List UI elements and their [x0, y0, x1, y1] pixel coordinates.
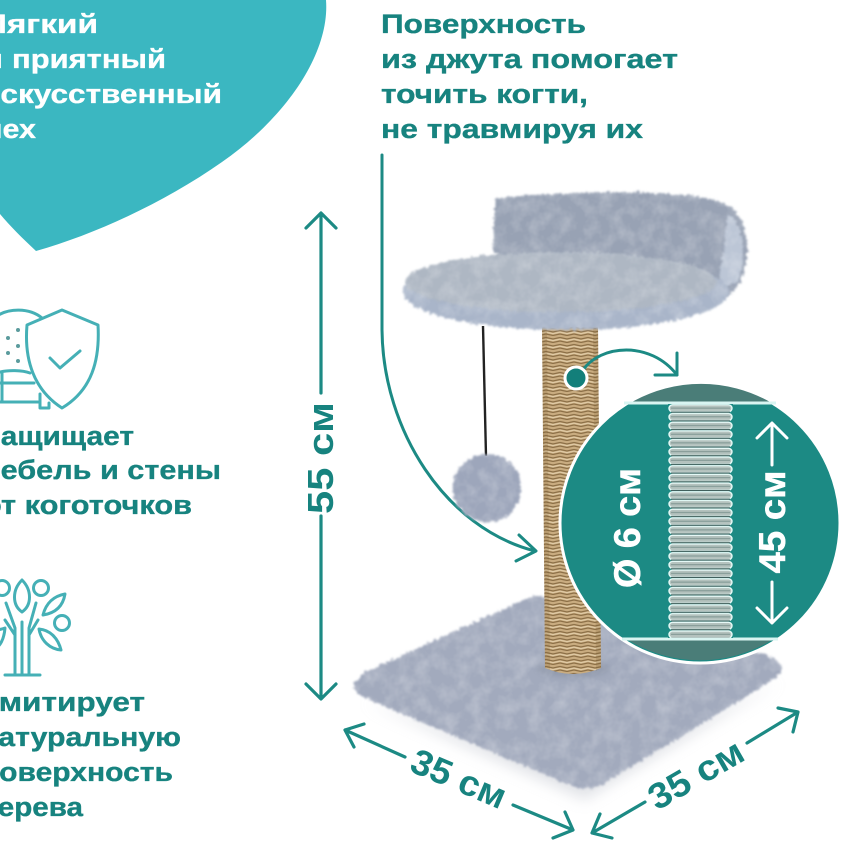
base shadow: [365, 682, 780, 800]
heading: jute surface: точить когти,: [381, 79, 588, 109]
band lines: [622, 403, 778, 639]
heading: jute surface: [381, 9, 678, 144]
circle background: [560, 383, 840, 663]
height dimension: 55 cm: [300, 213, 341, 699]
backrest: [493, 192, 747, 296]
heading: jute surface: не травмируя их: [381, 114, 643, 144]
toy ball: [453, 454, 521, 522]
post shadow: [537, 659, 609, 677]
post shading: [542, 325, 601, 671]
callout shape: [0, 0, 326, 251]
top cap: [632, 384, 770, 402]
callout text: приятный: [12, 44, 166, 74]
post height arrows: [757, 423, 787, 623]
callout pointer arrow: [565, 350, 677, 389]
text: protects furniture: [0, 421, 221, 520]
pointer dot: [565, 367, 587, 389]
height arrow: [306, 213, 336, 699]
teal heart callout: [0, 0, 326, 251]
right width arrow: [592, 708, 798, 838]
bottom cap: [628, 640, 772, 660]
callout text: [0, 9, 222, 144]
right width dimension: 35 cm: [592, 708, 798, 838]
detail circle: [560, 383, 840, 663]
left width dimension: 35 cm: [345, 724, 573, 838]
icon: tree: [0, 580, 70, 675]
post height label: 45 см: [752, 470, 793, 574]
height label: 55 см: [300, 402, 341, 514]
shield: [26, 310, 98, 408]
diameter label: Ø 6 см: [607, 468, 648, 588]
jute post: [542, 325, 601, 674]
fur base: [354, 596, 782, 788]
pointer curve: [583, 350, 677, 375]
left width label: 35 см: [405, 740, 513, 817]
scratching post product: [354, 192, 782, 800]
rope detail: [668, 404, 733, 638]
left width arrow: [345, 724, 573, 838]
arrow: surface to post: [382, 155, 536, 561]
text: imitates wood: [0, 687, 181, 822]
right width label: 35 см: [640, 730, 751, 818]
toy string: [483, 326, 486, 456]
backrest highlight: [718, 214, 743, 290]
platform top: [405, 252, 717, 312]
heading: jute surface: Поверхность: [381, 9, 586, 39]
platform edge: [403, 254, 729, 330]
check mark: [50, 351, 80, 368]
heading: jute surface: из джута помогает: [381, 44, 678, 74]
icon: shield and armchair: [0, 310, 98, 408]
